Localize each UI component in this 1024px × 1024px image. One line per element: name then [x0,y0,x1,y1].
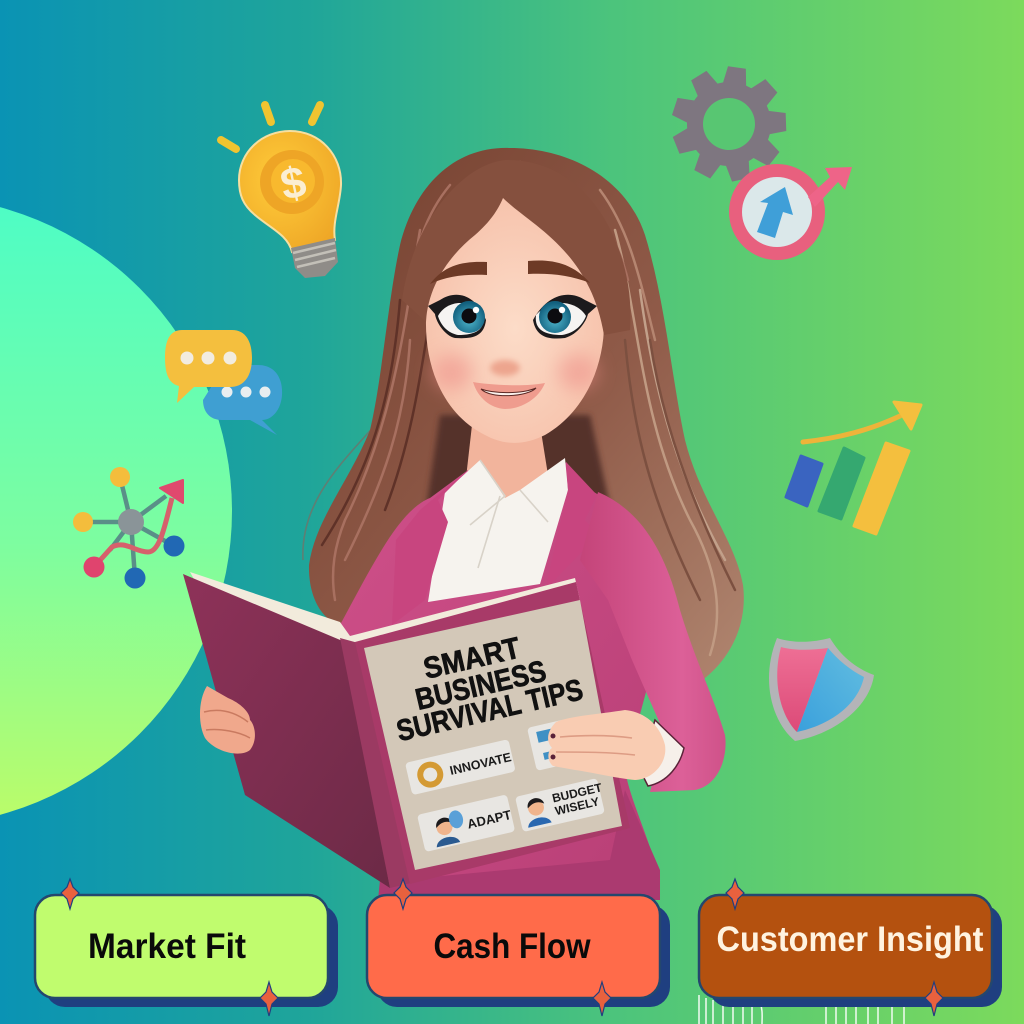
decorative white lines [699,995,904,1024]
jacket right sleeve [580,492,726,792]
left eye [428,295,486,338]
card: Cash Flow: Cash Flow [434,927,591,966]
chip: budget wisely: BUDGET [551,780,604,805]
chip: budget wisely [515,777,608,832]
hair fringe [402,160,631,335]
card: Market Fit: Market Fit [88,927,246,966]
open book [183,572,630,888]
blush [432,354,598,390]
icon: chat bubbles [165,330,282,435]
icon: light bulb with dollar sign [221,105,341,278]
left hand fingers [200,686,255,754]
yellow speech bubble [165,330,252,403]
neck [466,425,548,530]
star accent top [61,879,79,909]
left lapel [392,470,468,625]
book title: SMART [420,632,523,686]
chip: budget wisely: WISELY [554,794,601,818]
shirt cuff [640,720,684,786]
card: Cash Flow [367,879,670,1016]
card: Customer Insight [699,879,1002,1016]
right hand [548,710,665,780]
hair back [309,148,744,682]
hair strands [322,162,735,655]
star accent top [394,879,412,909]
spine [340,638,415,888]
wisp of hair [303,425,375,560]
book title: SURVIVAL TIPS [394,673,586,748]
chip: innovate: INNOVATE [448,750,513,778]
pink jacket body [340,462,660,890]
book title [394,632,586,748]
star accent bottom [260,982,278,1016]
star accent top [726,879,744,909]
chip: adapt: ADAPT [466,807,513,832]
icon: target with arrows [729,164,852,260]
lower jacket and trousers [378,790,660,900]
icon: light bulb with dollar sign: $ [276,157,310,210]
card: Customer Insight: Customer Insight [716,920,984,959]
right lapel [545,462,598,590]
shirt collar shading [470,460,548,568]
white shirt [428,458,568,602]
icon: shield [769,638,874,741]
cover page [364,600,622,870]
star accent bottom [925,982,943,1016]
chip: innovate [405,739,516,795]
nose [490,360,520,376]
chip: hidden by hand [527,719,574,771]
inner dark hair behind neck [425,415,612,515]
chip: adapt [417,794,515,852]
card: Market Fit [35,879,338,1016]
character: businesswoman [183,148,744,900]
decorative left circle [0,196,232,826]
icon: bar chart with arrow [786,402,921,534]
blue speech bubble [203,365,282,435]
right eye [533,295,597,339]
icon: gear [663,59,795,189]
pages [190,572,580,660]
mouth [473,382,545,409]
book title: BUSINESS [412,655,549,717]
right cover [355,582,630,884]
face [426,188,604,443]
icon: network growth [73,467,184,588]
star accent bottom [593,982,611,1016]
left cover [183,574,390,888]
eyebrows [430,260,590,284]
